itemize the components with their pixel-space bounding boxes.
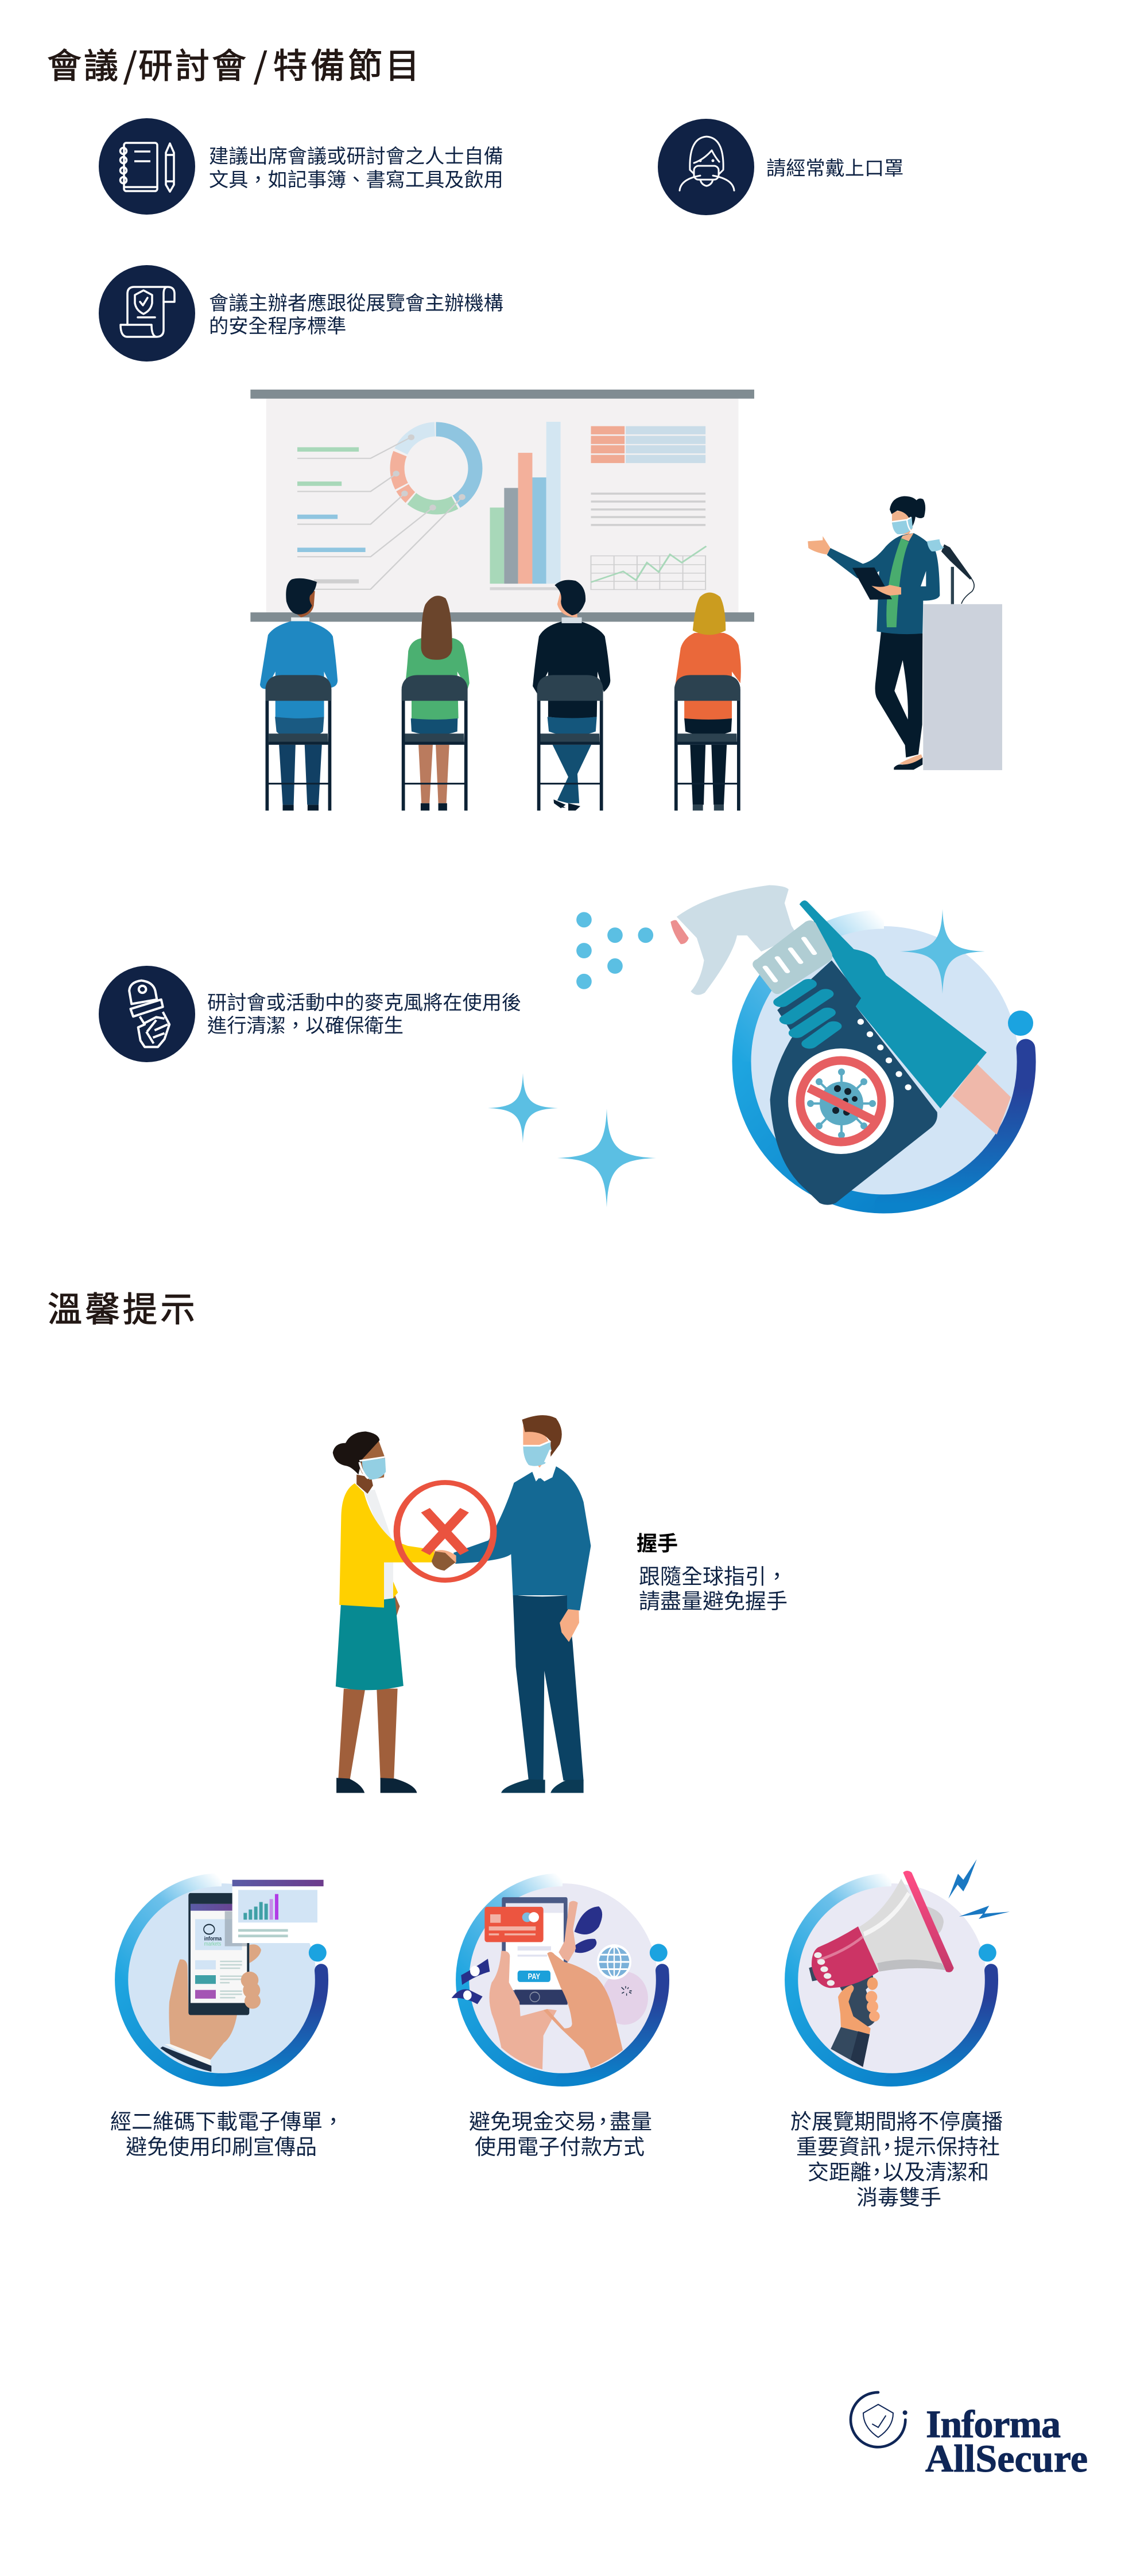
logo: Informa AllSecure [851, 2392, 1088, 2480]
illustration: mobile payment: PAY [528, 1972, 540, 1981]
text: avoid cash [469, 2104, 652, 2161]
illustration: two people shaking hands with prohibition sign [333, 1415, 591, 1793]
illustration: phone with e-brochure: markets [204, 1941, 221, 1948]
person 4: orange sweater [676, 592, 741, 811]
illustration: masked speaker at podium [808, 496, 1002, 770]
person 2: green sweater [405, 596, 470, 811]
sparkle large [557, 1109, 656, 1207]
woman in yellow cardigan [333, 1431, 435, 1793]
text: bring own stationery: 建議出席會議或研討會之人士自備 [209, 140, 503, 169]
sparkle small [488, 1073, 558, 1143]
disc background [750, 926, 1018, 1195]
icon: scroll with shield [99, 265, 195, 362]
text: download e-brochure: 經二維碼下載電子傳單， [110, 2104, 344, 2135]
title: warm tips section: 溫馨提示 [48, 1282, 198, 1332]
text: follow organiser safety standards: 會議主辦者應跟從展覽會主辦機構 [209, 287, 503, 316]
donut chart [381, 413, 491, 523]
handshake [432, 1550, 456, 1571]
text: clean microphones after use [207, 986, 521, 1038]
icon: hand holding microphone [99, 966, 195, 1062]
text: follow organiser safety standards [209, 287, 503, 339]
illustration: mobile payment [452, 1880, 668, 2080]
text: broadcast reminders: 交距離，以及清潔和 [808, 2155, 989, 2186]
microphone on stand [941, 545, 974, 604]
icon: notebook and pen [99, 118, 195, 215]
folding chairs [266, 675, 740, 811]
text: download e-brochure [110, 2104, 344, 2161]
text: broadcast reminders: 於展覽期間將不停廣播 [790, 2104, 1003, 2135]
text: handshake advice: 跟隨全球指引， [639, 1559, 788, 1590]
brand ring [742, 919, 1033, 1204]
logo: Informa AllSecure: Informa [926, 2402, 1061, 2446]
person 1: blue sweater [260, 578, 338, 811]
text: handshake advice [637, 1527, 788, 1615]
podium [923, 604, 1002, 770]
person 3: black sweater [533, 580, 610, 811]
text: clean microphones after use: 進行清潔，以確保衛生 [207, 1009, 404, 1038]
text: bring own stationery: 文具，如記事簿、書寫工具及飲用 [209, 164, 503, 192]
sparkle behind bottle [900, 909, 985, 994]
illustration: spray bottle and sparkles [488, 885, 1033, 1207]
no-virus label [788, 1048, 894, 1154]
illustration: phone with e-brochure: informa [204, 1936, 222, 1942]
text: broadcast reminders: 重要資訊，提示保持社 [796, 2130, 1000, 2161]
text: follow organiser safety standards: 的安全程序標準 [209, 310, 346, 339]
spray bottle and gloved hand [576, 885, 1011, 1205]
man in blue sweater [453, 1415, 591, 1793]
illustration: phone with e-brochure [122, 1880, 327, 2080]
prohibition sign [397, 1482, 494, 1580]
illustration: audience watching presentation screen [250, 390, 754, 811]
text: broadcast reminders [790, 2104, 1003, 2211]
speaker figure [808, 496, 944, 770]
logo: Informa AllSecure: AllSecure [925, 2437, 1088, 2480]
text: avoid cash: 使用電子付款方式 [475, 2130, 645, 2161]
text: handshake advice: 握手 [637, 1527, 678, 1557]
text: broadcast reminders: 消毒雙手 [856, 2180, 941, 2211]
text: handshake advice: 請盡量避免握手 [639, 1584, 788, 1615]
title: conference section: 會議/研討會/特備節目 [47, 38, 420, 88]
illustration: megaphone [792, 1859, 1010, 2080]
text: wear a mask: 請經常戴上口罩 [766, 152, 903, 181]
text: download e-brochure: 避免使用印刷宣傳品 [126, 2130, 317, 2161]
icon: person wearing mask [658, 119, 754, 215]
presentation screen with charts [250, 390, 754, 621]
text: bring own stationery [209, 140, 503, 192]
text: clean microphones after use: 研討會或活動中的麥克風將在使用後 [207, 986, 521, 1015]
text: avoid cash: 避免現金交易，盡量 [469, 2104, 652, 2135]
